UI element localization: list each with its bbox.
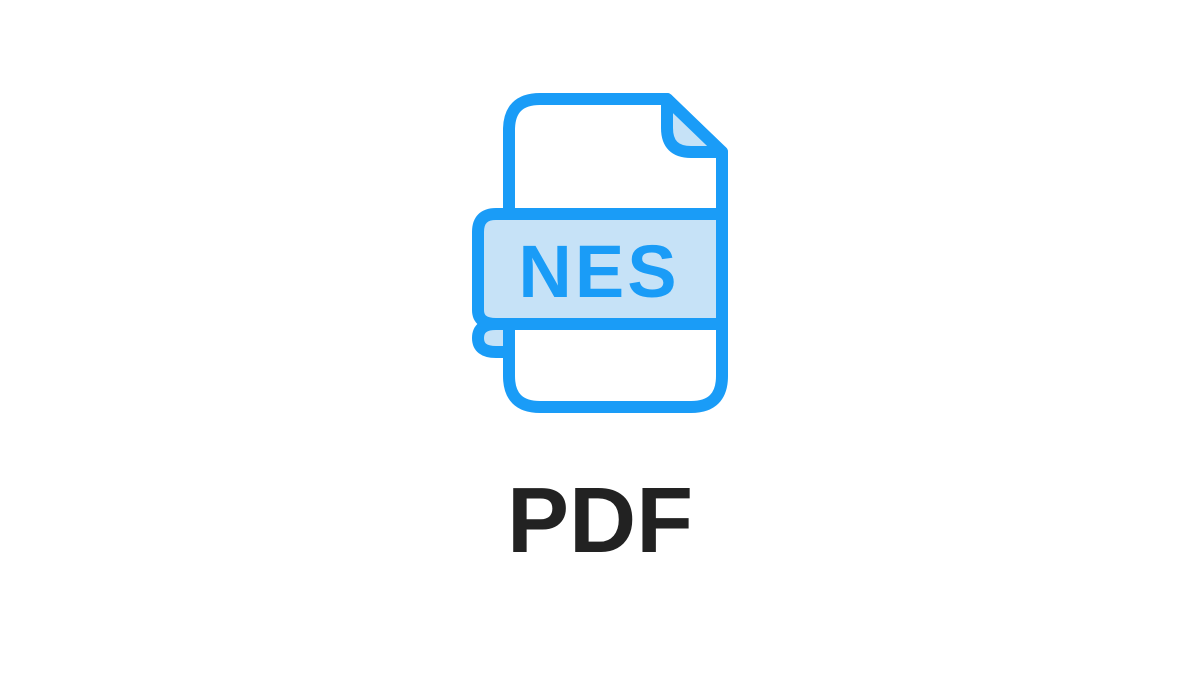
label: PDF: PDF [507,468,693,572]
icon text: NES: NES [518,230,680,313]
folded corner [667,99,722,152]
curl under band [478,324,509,352]
label band [478,214,722,324]
document body [509,99,722,407]
